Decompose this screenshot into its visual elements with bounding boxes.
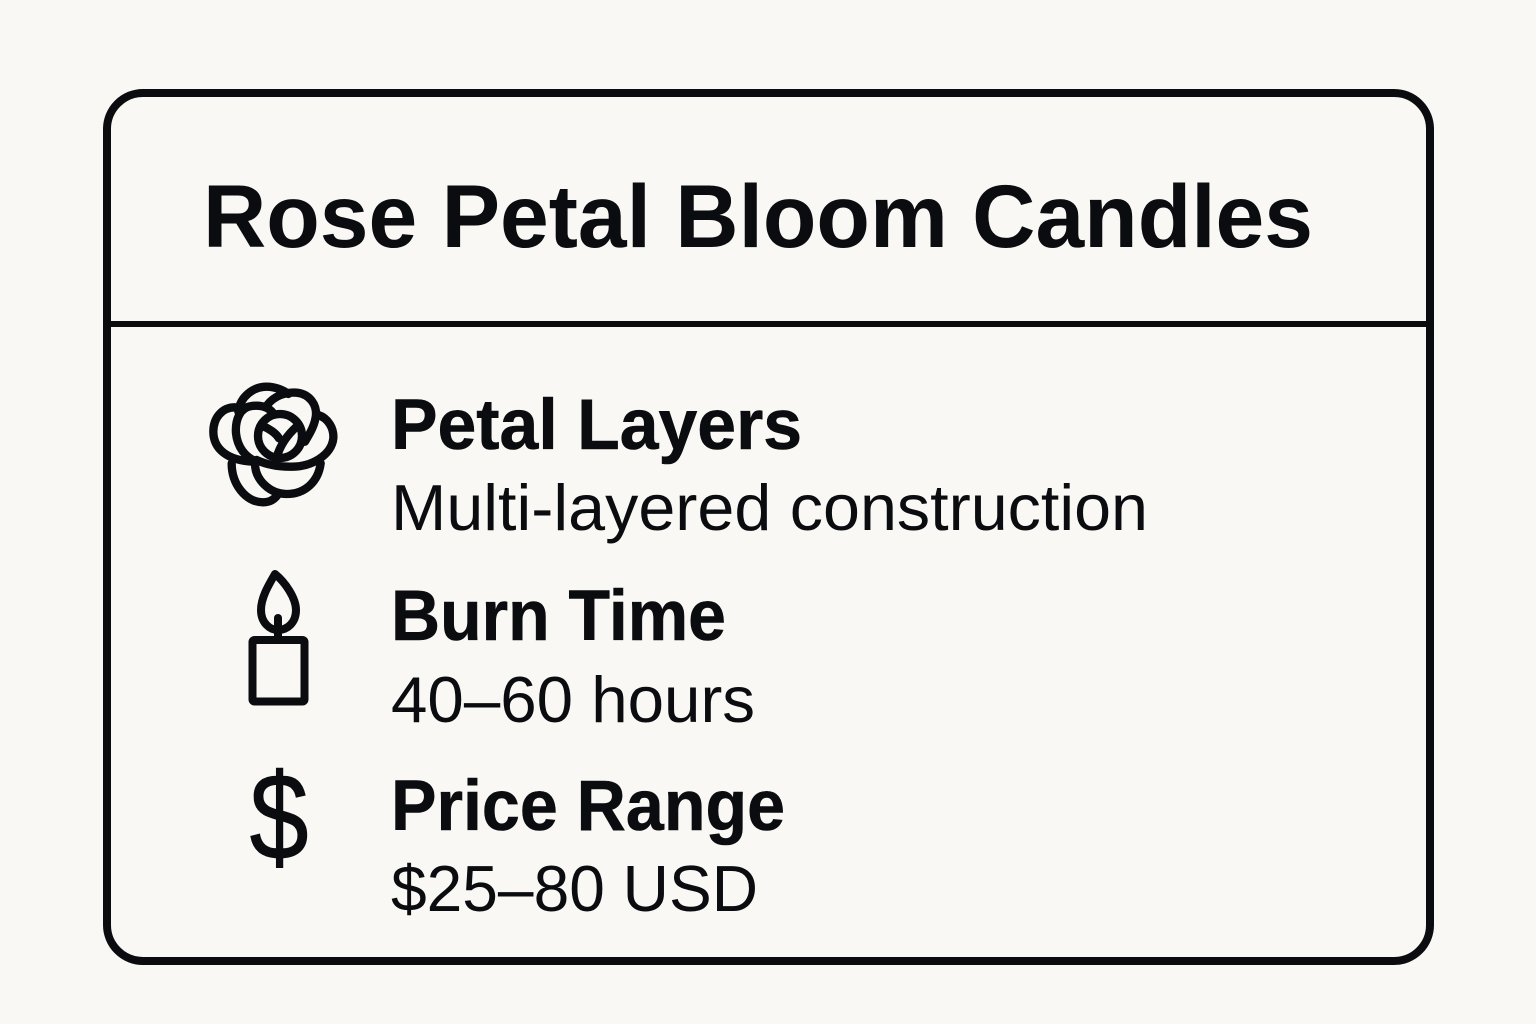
icon: dollar sign: $ [250,749,308,886]
heading: price range: Price Range [391,767,785,846]
icon: candle [252,574,304,702]
title: Rose Petal Bloom Candles [203,166,1313,266]
description: petal layers: Multi-layered construction [391,471,1148,544]
heading: petal layers: Petal Layers [391,386,802,465]
description: price range: $25–80 USD [391,852,758,925]
text block: burn time [391,577,755,736]
icon: rose [213,387,333,502]
text block: price range [391,767,785,925]
text block: petal layers [391,386,1148,544]
heading: burn time: Burn Time [391,577,726,656]
panel: card frame [107,93,1430,961]
description: burn time: 40–60 hours [391,663,755,736]
